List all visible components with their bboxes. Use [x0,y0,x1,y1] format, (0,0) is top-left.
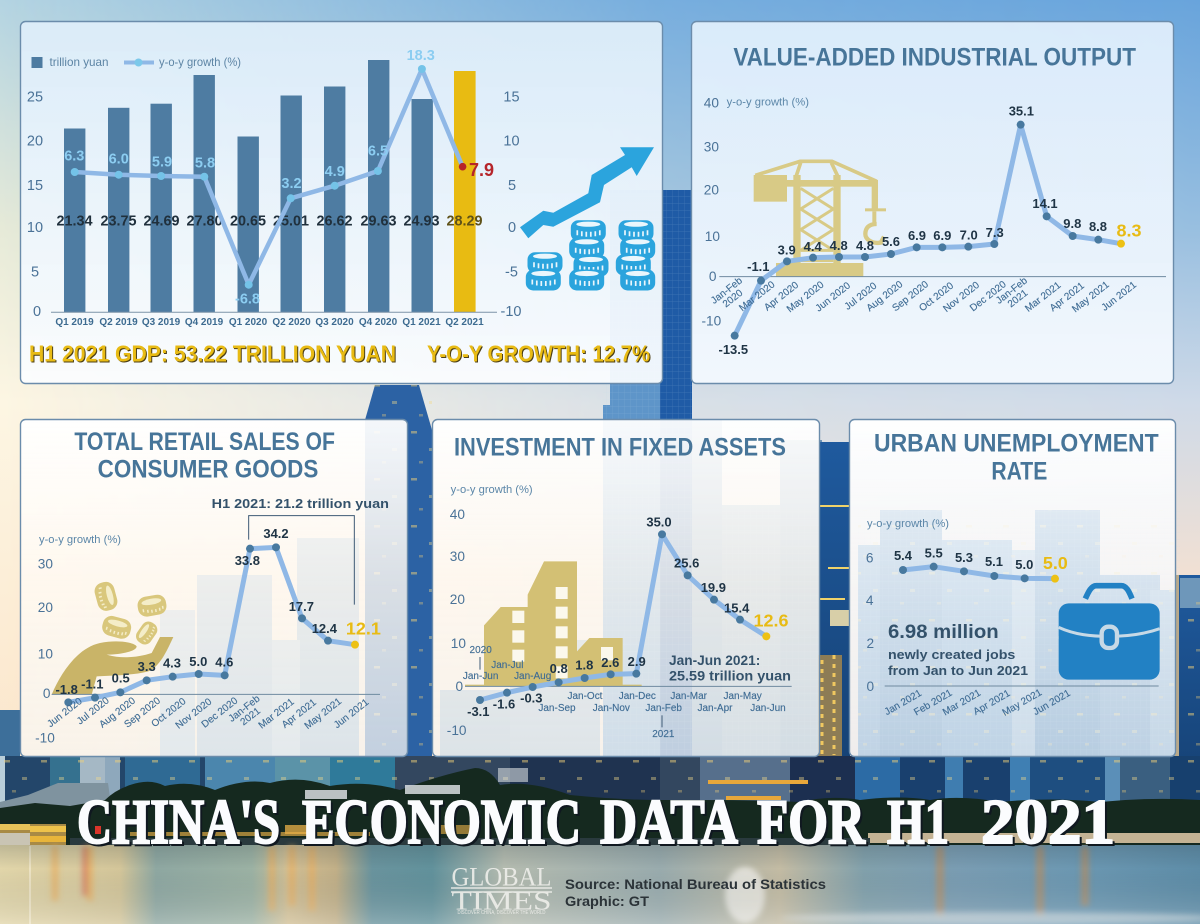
left axis labels: 25 [27,90,43,106]
riverfront promenade [868,833,1200,843]
data labels: 5.1 [985,554,1003,569]
data labels: 2.9 [628,654,646,669]
data labels: 12.6 [753,610,789,630]
x axis labels: Jan-Apr [698,703,733,714]
x axis labels: Feb 2021 [912,687,955,718]
main title [77,786,1115,857]
data labels [894,545,1068,573]
icon: briefcase [1059,586,1160,680]
callout: Jan-Jun total: 25.59 trillion yuan [669,667,791,683]
data labels: -1.1 [81,676,104,691]
axis [719,275,1166,278]
x axis labels: Jan-Mar [670,691,708,702]
category labels: Q2 2021 [445,317,484,328]
data labels: 6.9 [908,228,926,243]
y axis labels: 40 [704,95,719,110]
shoreline lights [95,825,470,836]
x axis labels: Mar 2021 [257,696,297,731]
x axis labels: Apr 2020 [762,280,801,313]
x axis labels: Jan-Sep [538,703,576,714]
y axis labels: 30 [38,556,53,571]
y axis labels: 6 [866,550,873,565]
category labels: Q4 2020 [359,317,398,328]
title: CONSUMER GOODS [98,456,318,484]
y axis labels: 2 [867,636,874,651]
line chart: y-o-y growth: 6.0 [109,151,129,167]
data labels: 9.8 [1063,216,1081,231]
dark building at right edge [1175,575,1200,808]
icon: coin stacks [526,220,655,290]
y axis labels: 20 [450,592,465,607]
y axis labels [701,95,722,328]
x axis labels: Jul 2020 [843,280,880,313]
x axis labels: Jan-Dec [619,691,656,702]
x axis labels: Jan-Jun [750,703,786,714]
bracket: H1 total: H1 2021: 21.2 trillion yuan [212,496,389,511]
bar values: 21.34 [56,214,93,230]
right axis labels: 5 [508,178,516,194]
axis unit: y-o-y growth (%) [39,534,121,546]
y axis labels: 0 [43,686,51,701]
main title: CHINA'S [77,786,280,857]
x axis labels: Jan-Feb [994,275,1030,307]
line chart [731,121,1125,340]
x axis labels: 2020 [470,645,492,656]
data labels: 7.3 [986,225,1004,240]
y axis labels: 30 [704,139,719,154]
axis [52,693,380,696]
x axis labels: Jan-Feb [645,703,682,714]
y axis labels: 30 [450,549,465,564]
x axis labels [463,645,786,740]
data labels: 19.9 [701,580,726,595]
data labels: 35.1 [1009,103,1034,118]
callout: new jobs: newly created jobs [888,647,1015,662]
x axis labels: Mar 2021 [1023,280,1064,315]
icon: tower crane [754,161,886,277]
x axis labels: 2021 [1006,287,1031,310]
data labels: 12.4 [312,621,338,636]
panel: urban unemployment rate [850,420,1176,756]
legend [32,55,241,69]
x axis labels: 2020 [721,287,746,310]
x axis labels: May 2021 [1001,687,1044,719]
source and credit: Source: National Bureau of Statistics [565,876,826,892]
title [874,430,1159,485]
x axis labels [45,693,372,732]
main title: DATA [600,786,738,857]
data labels: 1.8 [575,657,593,672]
x axis labels [883,687,1073,719]
main title: H1 [887,786,949,857]
line chart [899,563,1059,583]
bar values: 24.69 [143,214,180,230]
left axis labels: 0 [33,304,41,320]
icon: rising arrow [520,147,654,238]
left axis labels: 15 [27,178,43,194]
data labels: 4.6 [215,654,233,669]
x axis labels: Apr 2021 [1048,280,1087,314]
y axis labels: -10 [35,730,55,745]
title: INVESTMENT IN FIXED ASSETS [454,433,786,461]
axis unit: y-o-y growth (%) [451,484,533,496]
title [74,428,335,484]
bar chart: quarterly GDP [51,60,497,312]
x axis labels: Mar 2021 [941,687,983,718]
title: URBAN UNEMPLOYMENT [874,430,1159,458]
axis unit: y-o-y growth (%) [867,518,949,530]
y axis labels: 0 [867,679,875,694]
x axis labels: Jan-Aug [514,671,551,682]
data labels [467,514,789,719]
x axis labels: Oct 2020 [917,280,956,314]
right axis labels: 10 [503,134,520,150]
x axis labels: Apr 2021 [972,688,1013,718]
x axis labels: Sep 2020 [122,695,163,730]
left axis labels: 10 [27,220,43,236]
data labels: 5.3 [955,550,973,565]
category labels: Q1 2020 [229,317,268,328]
category labels [55,317,484,328]
data labels: -1.1 [747,259,770,274]
title: TOTAL RETAIL SALES OF [74,428,335,456]
boat [0,824,66,845]
data labels: -1.8 [55,682,78,697]
category labels: Q2 2020 [272,317,311,328]
data labels: 12.1 [346,619,381,639]
line chart: y-o-y growth: 5.9 [152,155,172,171]
panel: GDP [20,22,662,384]
category labels: Q2 2019 [99,317,138,328]
line chart [476,530,770,704]
axis [885,684,1159,687]
logo: Global Times: GLOBAL [452,862,552,892]
x axis labels: Nov 2020 [174,696,215,731]
data labels: -3.1 [467,704,490,719]
x axis labels: Jan-Feb [709,275,745,307]
data labels: 5.4 [894,548,913,563]
title: VALUE-ADDED INDUSTRIAL OUTPUT [733,43,1136,71]
x axis labels: Aug 2020 [865,279,906,314]
axis [465,685,792,688]
y axis labels: 0 [709,269,717,284]
title: RATE [991,457,1047,485]
bar values: 23.75 [100,214,137,230]
data labels: 5.0 [1043,553,1068,573]
x axis labels [709,275,1139,315]
callout: new jobs: 6.98 million [888,622,999,643]
x axis labels: Dec 2020 [968,279,1009,314]
y axis labels: 4 [866,593,874,608]
callout: new jobs: from Jan to Jun 2021 [888,663,1029,678]
data labels: 5.5 [925,545,943,560]
data labels: -0.3 [520,690,543,705]
low gray roof [0,783,112,812]
data labels [55,526,381,697]
y axis labels [447,507,467,738]
bar values: 24.93 [403,214,440,230]
waterfront trees [0,768,1200,845]
panel: value-added industrial output [692,22,1174,384]
icon: buildings [465,561,642,686]
data labels: 3.9 [778,242,796,257]
category labels: Q3 2020 [315,317,354,328]
far buildings band [0,756,1200,811]
line chart: y-o-y growth: 4.9 [325,164,345,180]
x axis labels: Jun 2021 [1031,688,1073,718]
category labels: Q1 2021 [402,317,441,328]
data labels: 35.0 [646,514,672,529]
line chart: y-o-y growth: 6.3 [64,149,84,165]
bar values: 25.01 [273,214,309,230]
data labels: 5.0 [1015,557,1033,572]
main title: 2021 [981,786,1115,857]
data labels: 14.1 [1032,196,1058,211]
data labels: 33.8 [235,553,260,568]
source and credit: Graphic: GT [565,893,649,909]
main title: FOR [757,786,866,857]
bracket: H1 total [212,496,389,605]
line chart: y-o-y growth: -6.8 [235,291,260,307]
data labels: 4.4 [804,239,822,254]
y axis labels [866,550,875,694]
panel: total retail sales [20,420,408,756]
y axis labels: 40 [450,507,465,522]
y axis labels: 10 [38,646,53,661]
data labels: -13.5 [719,342,748,357]
right axis labels: 15 [503,90,520,106]
x axis labels: Jan-Jul [491,660,523,671]
y axis labels: 10 [705,229,720,244]
line chart: y-o-y growth: 18.3 [407,48,435,64]
central skyscraper [603,190,692,805]
water reflections [55,846,1200,924]
x axis labels: May 2021 [1070,279,1112,315]
data labels: 5.0 [189,654,207,669]
category labels: Q3 2019 [142,317,181,328]
x axis labels: Jan-Nov [593,703,630,714]
main title: ECONOMIC [302,786,581,857]
line chart: y-o-y growth: 6.5 [368,143,388,159]
x axis labels: Aug 2020 [97,695,138,730]
y axis labels: 20 [704,182,719,197]
left axis labels [27,90,43,320]
callout: Jan-Jun total: Jan-Jun 2021: [669,652,760,668]
left axis labels: 20 [27,134,43,150]
logo: Global Times [451,862,552,916]
x axis labels: Mar 2020 [737,279,778,314]
data labels: 2.6 [601,655,619,670]
pale mid-ground buildings seen through panels [160,420,1180,805]
panel: investment in fixed assets [432,420,820,756]
data labels: 6.9 [933,228,951,243]
data labels: 5.6 [882,234,900,249]
data labels: 0.8 [550,661,568,676]
x axis labels: Apr 2021 [280,697,319,731]
bar values [56,214,483,230]
x axis labels: Jun 2021 [332,697,372,731]
headline: y-o-y growth: Y-O-Y GROWTH: 12.7% [427,340,650,366]
y axis labels: -10 [447,723,467,738]
x axis labels: Jun 2021 [1100,279,1139,314]
y axis labels: 10 [451,636,466,651]
data labels: 4.3 [163,655,181,670]
data labels: 25.6 [674,555,699,570]
x axis labels: Sep 2020 [890,279,931,314]
y axis labels [35,556,55,745]
data labels: 8.8 [1089,219,1107,234]
x axis labels: Jul 2020 [75,695,112,727]
line chart [64,543,359,706]
data labels: -1.6 [493,696,515,711]
data labels: 4.8 [830,238,848,253]
x axis labels: 2021 [239,705,263,728]
source and credit [565,876,826,909]
bar values: 27.80 [186,214,223,230]
data labels: 4.8 [856,238,874,253]
data labels: 17.7 [289,599,314,614]
x axis labels: Jun 2020 [45,696,85,730]
bar values: 20.65 [230,214,266,230]
category labels: Q1 2019 [55,317,94,328]
callout: Jan-Jun total [669,652,791,683]
data labels [719,103,1142,357]
line chart: y-o-y growth: 3.2 [281,176,302,192]
tower at left centre [365,385,432,805]
y axis labels: -10 [701,313,722,328]
left axis labels: 5 [31,264,39,280]
axis unit: y-o-y growth (%) [727,97,809,109]
line chart: y-o-y growth [64,48,494,307]
x axis labels: Jan-Oct [568,691,603,702]
bar values: 28.29 [446,214,483,230]
data labels: 34.2 [263,526,289,541]
headline: H1 GDP: H1 2021 GDP: 53.22 TRILLION YUAN [29,340,396,366]
x axis labels: Jun 2020 [814,280,853,314]
y axis labels: 20 [38,600,53,615]
callout: new jobs [888,622,1029,678]
right axis labels [501,90,521,320]
bar values: 26.62 [316,214,353,230]
logo: Global Times: TIMES [452,886,552,916]
bar values: 29.63 [360,214,397,230]
data labels: 8.3 [1116,220,1142,240]
legend: trillion yuan [50,55,108,69]
x axis labels: Dec 2020 [200,695,241,730]
data labels: 7.0 [960,227,978,242]
icon: hand with coins [52,580,173,695]
x axis labels: 2021 [652,729,675,740]
line chart: y-o-y growth: 7.9 [469,160,494,180]
data labels: 3.3 [138,659,156,674]
legend: y-o-y growth (%) [159,55,241,69]
dark tower in gap [818,442,850,807]
x axis labels: Oct 2020 [150,696,189,730]
y axis labels: 0 [456,679,464,694]
x axis labels: Jan-Feb [227,693,263,725]
right axis labels: 0 [508,220,516,236]
x axis labels: Nov 2020 [941,280,982,315]
data labels: 0.5 [112,670,130,685]
x axis labels: Jan-May [724,691,762,702]
category labels: Q4 2019 [185,317,224,328]
x axis labels: May 2021 [303,696,344,732]
logo: Global Times: DISCOVER CHINA, DISCOVER THE WORLD [458,910,546,916]
data labels: 15.4 [724,600,750,615]
right axis labels: -5 [505,264,518,280]
x axis labels: Jan 2021 [883,688,924,718]
x axis labels: May 2020 [785,279,827,315]
right axis labels: -10 [501,304,521,320]
line chart: y-o-y growth: 5.8 [195,155,215,171]
x axis labels: Jan-Jun [463,671,498,682]
waterfront low-rise blocks [305,768,528,799]
